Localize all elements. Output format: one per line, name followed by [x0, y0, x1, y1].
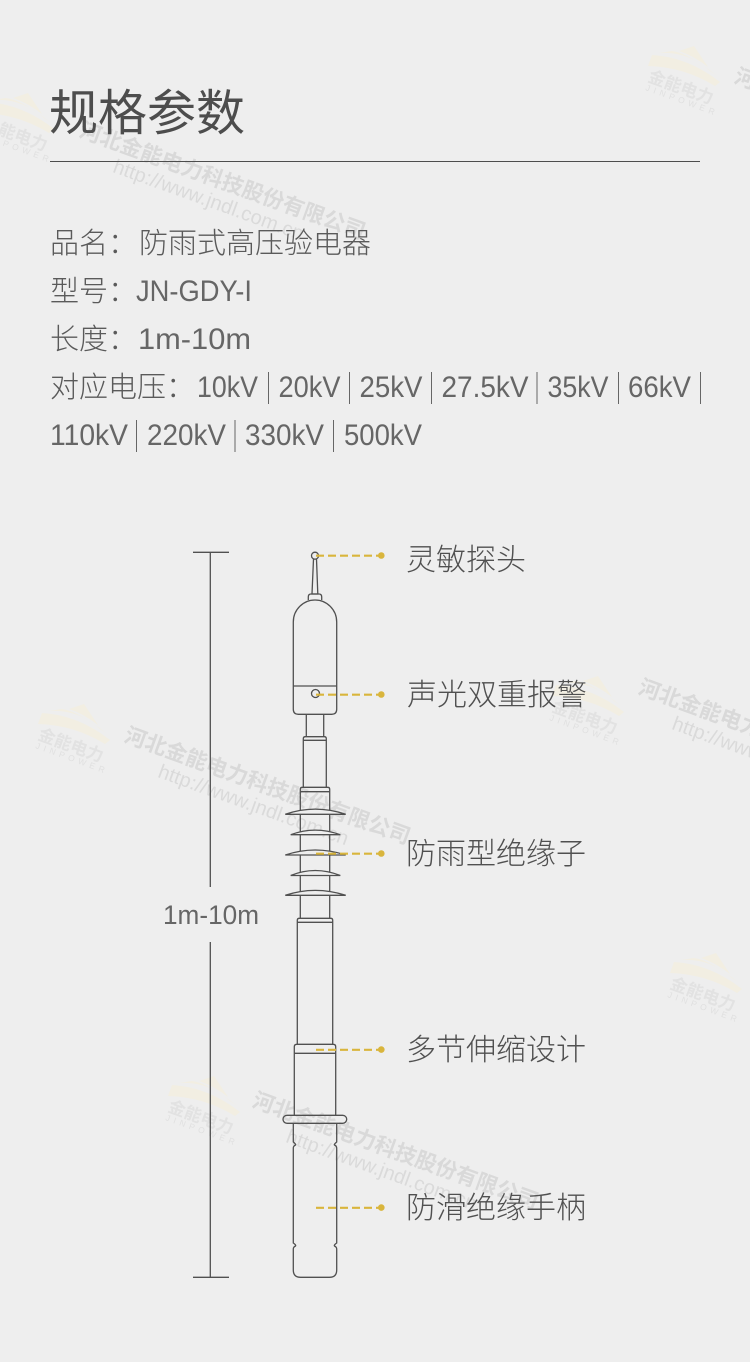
spec: voltages line one: 10kV	[197, 371, 258, 404]
watermark logo: middle center	[548, 676, 624, 748]
watermark logo: middle center: 金能电力	[550, 696, 620, 738]
anti-slip handle	[293, 1123, 337, 1277]
watermark logo: right: JINPOWER	[666, 989, 742, 1025]
spec: product name: 防雨式高压验电器	[139, 227, 371, 260]
watermark text: middle: http://www.jndl.com.cn	[155, 761, 352, 850]
watermark text: lower: http://www.jndl.com.cn	[283, 1126, 480, 1215]
callout: telescopic design: 多节伸缩设计	[406, 1034, 586, 1067]
neck and upper tube	[303, 714, 326, 787]
spec: voltages line one: 35kV	[548, 371, 608, 404]
device: rainproof high-voltage detector	[283, 552, 347, 1277]
title divider	[50, 161, 700, 162]
spec: model: 型号：	[50, 275, 137, 308]
spec: voltages line two: 330kV	[245, 419, 324, 452]
spec: length	[50, 323, 251, 356]
watermark logo: middle center: JINPOWER	[548, 712, 624, 748]
callout: anti-slip handle	[316, 1192, 586, 1225]
spec: product name: 品名：	[50, 228, 137, 260]
spec: voltages line one	[50, 371, 701, 404]
probe tip	[308, 552, 322, 600]
telescopic section	[297, 918, 333, 1044]
callout: sensitive probe	[316, 544, 526, 577]
spec: length: 1m-10m	[138, 323, 251, 356]
watermark logo: middle left: JINPOWER	[34, 740, 110, 776]
watermark text: lower: 河北金能电力科技股份有限公司	[249, 1087, 542, 1214]
watermark logo: right: 金能电力	[668, 973, 738, 1015]
spec: voltages line two: 220kV	[147, 419, 226, 452]
spec: voltages line two: 500kV	[344, 419, 422, 452]
specifications text block	[50, 227, 701, 452]
spec: voltages line one: 27.5kV	[442, 371, 528, 404]
rain sheds	[285, 809, 346, 895]
watermark text: top left: 河北金能电力科技股份有限公司	[76, 117, 369, 244]
insulator tube	[300, 787, 330, 918]
title: 规格参数	[49, 87, 245, 141]
watermark logo: lower left: JINPOWER	[164, 1112, 240, 1148]
spec: voltages line one: 25kV	[360, 371, 422, 404]
spec: voltages line two: 110kV	[50, 419, 128, 452]
dimension line with length label	[163, 552, 259, 1277]
spec: voltages line one: 66kV	[628, 371, 691, 404]
callout: sound and light alarm	[316, 679, 587, 712]
callout: sensitive probe: 灵敏探头	[406, 544, 526, 577]
spec: voltages line one: 20kV	[278, 371, 340, 404]
spec: voltages line one: 对应电压：	[50, 371, 195, 404]
spec: voltages line two	[50, 419, 422, 452]
callout: anti-slip handle: 防滑绝缘手柄	[406, 1192, 586, 1225]
callout: rainproof insulator	[316, 838, 586, 871]
watermark text: top left: http://www.jndl.com.cn	[110, 156, 307, 245]
watermark logo: middle left: 金能电力	[36, 724, 106, 766]
handle guard ring	[283, 1115, 347, 1123]
watermark logo: lower left	[164, 1076, 240, 1148]
spec: model	[50, 275, 252, 308]
watermark text: middle: 河北金能电力科技股份有限公司	[121, 722, 414, 849]
watermark logo: top left	[0, 93, 54, 165]
spec: length: 长度：	[50, 323, 137, 356]
watermark logo: lower left: 金能电力	[166, 1096, 236, 1138]
watermark logo: middle left	[34, 704, 110, 776]
watermark logo: right	[666, 953, 742, 1025]
watermark logo: top right: JINPOWER	[644, 82, 720, 118]
dimension label: 1m-10m	[163, 900, 259, 930]
watermark logo: top right: 金能电力	[646, 66, 716, 108]
callout: rainproof insulator: 防雨型绝缘子	[406, 838, 586, 871]
spec: model: JN-GDY-I	[136, 275, 252, 308]
watermark logo: top right	[644, 46, 720, 118]
callout: telescopic design	[316, 1034, 586, 1067]
callout: sound and light alarm: 声光双重报警	[407, 679, 587, 712]
lower telescopic section	[294, 1044, 336, 1115]
alarm head	[293, 600, 337, 714]
